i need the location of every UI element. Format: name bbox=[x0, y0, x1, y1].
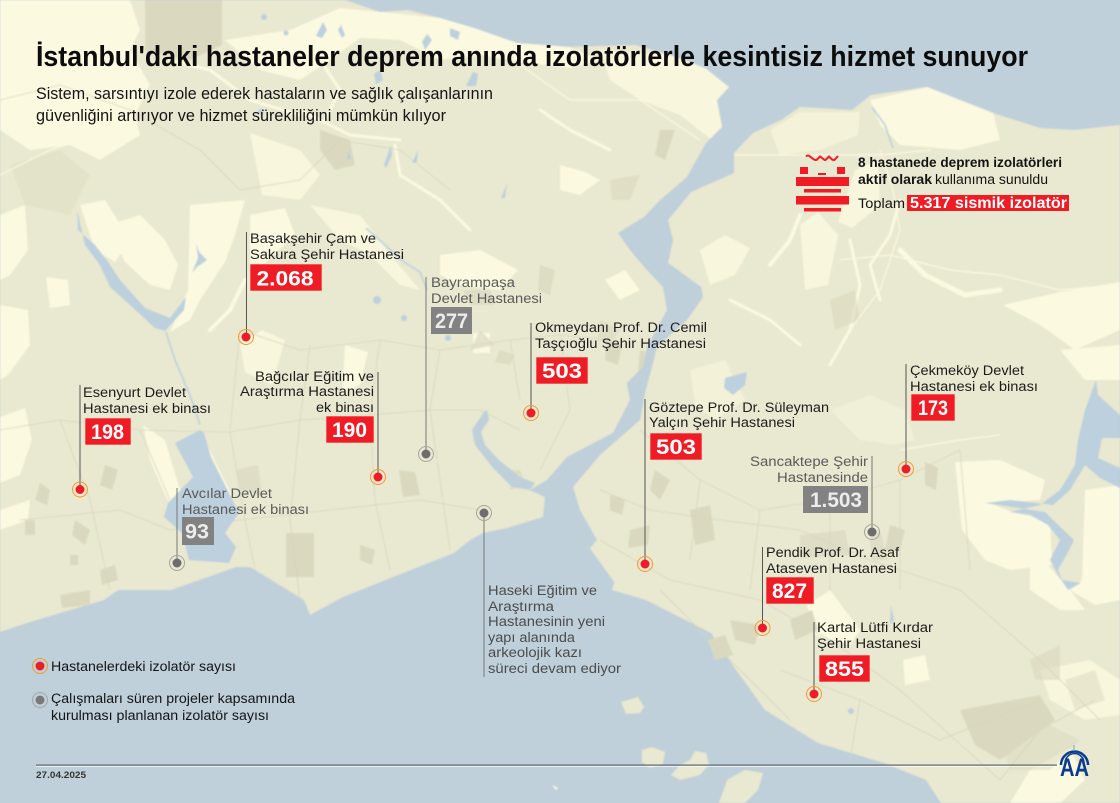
water: Bosphorus and Golden Horn bbox=[472, 127, 734, 560]
marker: Kartal Lütfi Kırdar Şehir Hastanesi bbox=[806, 620, 934, 702]
land: Asian side fill near Bosphorus south bbox=[573, 420, 700, 590]
subtitle: Sistem, sarsıntıyı izole ederek hastaların ve sağlık çalışanlarının bbox=[36, 85, 493, 103]
marker: Haseki Eğitim ve Araştırma Hastanesi note: arkeolojik kazı bbox=[488, 645, 582, 660]
marker: Haseki Eğitim ve Araştırma Hastanesi note: süreci devam ediyor bbox=[488, 661, 622, 676]
marker: Avcılar Devlet Hastanesi ek binası: 93 bbox=[185, 520, 209, 544]
marker: Okmeydanı Prof. Dr. Cemil Taşçıoğlu Şehir Hastanesi bbox=[524, 320, 707, 420]
marker: Sancaktepe Şehir Hastanesinde bbox=[750, 454, 880, 540]
light road lines north bbox=[0, 65, 1120, 450]
marker: Çekmeköy Devlet Hastanesi ek binası bbox=[898, 363, 1038, 476]
land: Asian side bbox=[573, 87, 1120, 803]
marker: Sancaktepe Şehir Hastanesinde: 1.503 bbox=[810, 489, 862, 512]
marker: Haseki Eğitim ve Araştırma Hastanesi note bbox=[476, 506, 622, 677]
marker: Kartal Lütfi Kırdar Şehir Hastanesi: Kartal Lütfi Kırdar bbox=[817, 620, 934, 635]
legend item: active isolators: Hastanelerdeki izolatör sayısı bbox=[51, 659, 236, 674]
legend item: planned isolators bbox=[32, 691, 296, 723]
icon: Anadolu Agency logo bbox=[1060, 745, 1089, 782]
marker: Haseki Eğitim ve Araştırma Hastanesi note: Haseki Eğitim ve bbox=[488, 583, 597, 598]
marker: Bağcılar Eğitim ve Araştırma Hastanesi ek binası bbox=[240, 369, 386, 484]
callout text: kullanıma sunuldu bbox=[935, 172, 1048, 187]
marker: Başakşehir Çam ve Sakura Şehir Hastanesi: Sakura Şehir Hastanesi bbox=[250, 247, 404, 262]
subtitle bbox=[36, 85, 493, 125]
marker: Haseki Eğitim ve Araştırma Hastanesi note: Araştırma bbox=[488, 599, 555, 614]
islands bbox=[552, 697, 763, 803]
marker: Avcılar Devlet Hastanesi ek binası: Avcılar Devlet bbox=[182, 486, 272, 501]
marker: Avcılar Devlet Hastanesi ek binası bbox=[170, 486, 309, 570]
date: 27.04.2025 bbox=[36, 770, 87, 781]
marker: Esenyurt Devlet Hastanesi ek binası: Hastanesi ek binası bbox=[83, 401, 211, 416]
marker: Bayrampaşa Devlet Hastanesi: 277 bbox=[435, 310, 468, 333]
marker: Başakşehir Çam ve Sakura Şehir Hastanesi: 2.068 bbox=[256, 268, 314, 290]
marker: Haseki Eğitim ve Araştırma Hastanesi note: Hastanesinin yeni bbox=[488, 614, 605, 629]
marker: Esenyurt Devlet Hastanesi ek binası bbox=[72, 385, 211, 497]
marker: Haseki Eğitim ve Araştırma Hastanesi note: yapı alanında bbox=[488, 630, 576, 645]
marker: Bağcılar Eğitim ve Araştırma Hastanesi ek binası: Bağcılar Eğitim ve bbox=[255, 369, 374, 384]
icon: seismic isolator bbox=[796, 156, 849, 212]
marker: Bayrampaşa Devlet Hastanesi: Bayrampaşa bbox=[431, 275, 516, 290]
marker: Çekmeköy Devlet Hastanesi ek binası: Hastanesi ek binası bbox=[910, 379, 1038, 394]
marker: Okmeydanı Prof. Dr. Cemil Taşçıoğlu Şehir Hastanesi: Taşçıoğlu Şehir Hastanesi bbox=[535, 336, 706, 351]
marker: Çekmeköy Devlet Hastanesi ek binası: 173 bbox=[918, 397, 948, 420]
callout total badge: 5.317 sismik izolatör bbox=[910, 195, 1067, 212]
legend bbox=[32, 658, 296, 723]
marker: Çekmeköy Devlet Hastanesi ek binası: Çekmeköy Devlet bbox=[910, 363, 1024, 378]
legend item: planned isolators: kurulması planlanan izolatör sayısı bbox=[51, 708, 269, 723]
marker: Bağcılar Eğitim ve Araştırma Hastanesi ek binası: 190 bbox=[332, 419, 367, 442]
marker: Okmeydanı Prof. Dr. Cemil Taşçıoğlu Şehir Hastanesi: Okmeydanı Prof. Dr. Cemil bbox=[535, 320, 707, 335]
marker: Göztepe Prof. Dr. Süleyman Yalçın Şehir Hastanesi: Göztepe Prof. Dr. Süleyman bbox=[649, 400, 829, 415]
marker: Göztepe Prof. Dr. Süleyman Yalçın Şehir Hastanesi: 503 bbox=[656, 436, 696, 459]
subtitle: güvenliğini artırıyor ve hizmet sürekliliğini mümkün kılıyor bbox=[36, 107, 446, 125]
marker: Başakşehir Çam ve Sakura Şehir Hastanesi bbox=[238, 231, 404, 344]
callout text: aktif olarak bbox=[858, 172, 932, 187]
marker: Kartal Lütfi Kırdar Şehir Hastanesi: Şehir Hastanesi bbox=[817, 636, 921, 651]
marker: Göztepe Prof. Dr. Süleyman Yalçın Şehir Hastanesi: Yalçın Şehir Hastanesi bbox=[649, 415, 795, 430]
marker: Bağcılar Eğitim ve Araştırma Hastanesi ek binası: ek binası bbox=[316, 400, 374, 415]
marker: Pendik Prof. Dr. Asaf Ataseven Hastanesi: Pendik Prof. Dr. Asaf bbox=[766, 545, 899, 560]
callout text bbox=[858, 155, 1062, 211]
marker: Başakşehir Çam ve Sakura Şehir Hastanesi: Başakşehir Çam ve bbox=[250, 231, 376, 246]
footer rule bbox=[36, 764, 1057, 767]
marker: Pendik Prof. Dr. Asaf Ataseven Hastanesi bbox=[755, 545, 899, 636]
marker: Sancaktepe Şehir Hastanesinde: Sancaktepe Şehir bbox=[750, 454, 869, 469]
marker: Kartal Lütfi Kırdar Şehir Hastanesi: 855 bbox=[825, 658, 864, 681]
marker: Bağcılar Eğitim ve Araştırma Hastanesi ek binası: Araştırma Hastanesi bbox=[240, 384, 374, 399]
marker: Göztepe Prof. Dr. Süleyman Yalçın Şehir Hastanesi bbox=[638, 399, 829, 572]
marker: Sancaktepe Şehir Hastanesinde: Hastanesinde bbox=[777, 470, 868, 485]
title: İstanbul'daki hastaneler deprem anında izolatörlerle kesintisiz hizmet sunuyor bbox=[36, 41, 1028, 73]
callout text: 8 hastanede deprem izolatörleri bbox=[858, 155, 1062, 170]
land: European side bbox=[0, 0, 729, 632]
marker: Avcılar Devlet Hastanesi ek binası: Hastanesi ek binası bbox=[182, 502, 309, 517]
icon: Anadolu Agency logo: AA bbox=[1060, 754, 1089, 782]
callout: 8 hospitals, total isolators bbox=[796, 155, 1069, 212]
marker: Okmeydanı Prof. Dr. Cemil Taşçıoğlu Şehir Hastanesi: 503 bbox=[542, 360, 582, 383]
callout text: Toplam bbox=[858, 196, 905, 211]
marker: Bayrampaşa Devlet Hastanesi bbox=[418, 275, 542, 462]
marker: Bayrampaşa Devlet Hastanesi: Devlet Hastanesi bbox=[431, 291, 542, 306]
marker: Esenyurt Devlet Hastanesi ek binası: 198 bbox=[91, 421, 124, 444]
marker: Pendik Prof. Dr. Asaf Ataseven Hastanesi: 827 bbox=[772, 580, 807, 603]
streams bbox=[166, 107, 893, 425]
marker: Esenyurt Devlet Hastanesi ek binası: Esenyurt Devlet bbox=[83, 385, 186, 400]
marker: Pendik Prof. Dr. Asaf Ataseven Hastanesi: Ataseven Hastanesi bbox=[766, 561, 897, 576]
forests: light streaks bbox=[170, 60, 1000, 365]
legend item: planned isolators: Çalışmaları süren projeler kapsamında bbox=[51, 691, 296, 706]
